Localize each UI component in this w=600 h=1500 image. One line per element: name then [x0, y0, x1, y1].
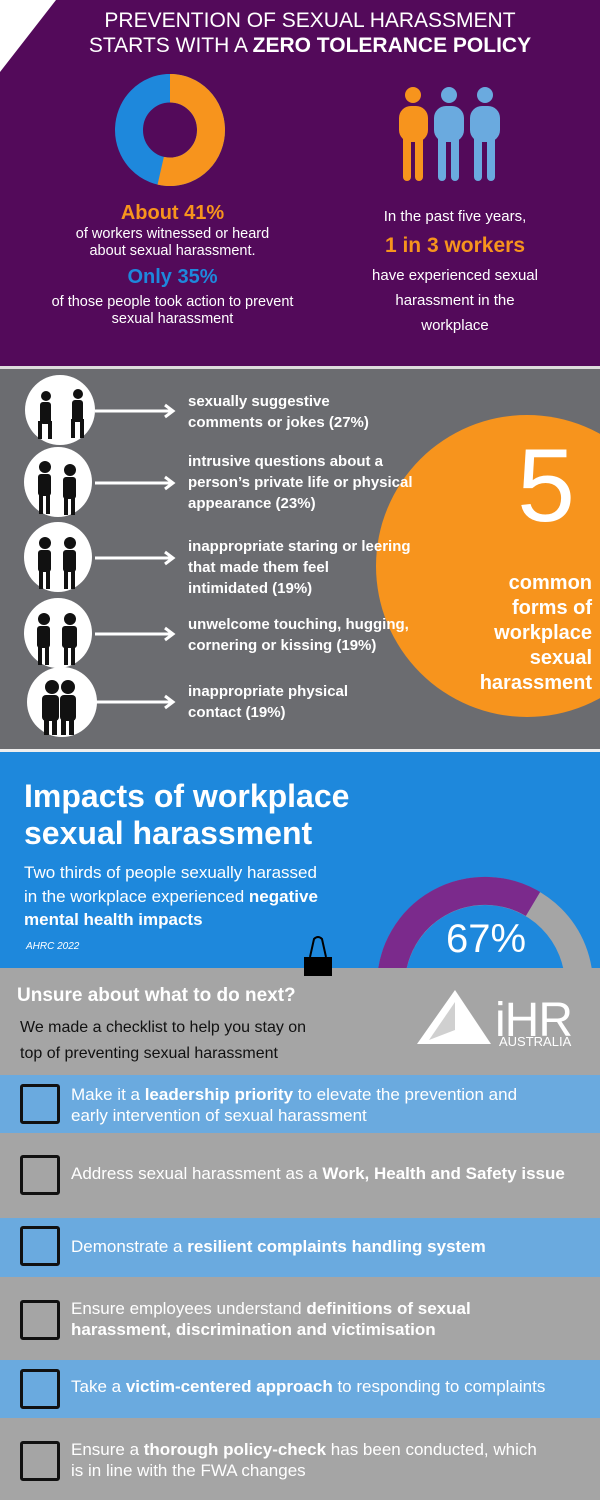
panel: 5 common forms: cornering or kissing (19%) [188, 637, 376, 654]
text: Ensure employees understand definitions of sexual [71, 1299, 471, 1318]
stat 41%: of those people took action to prevent [52, 294, 293, 310]
text: Ensure a thorough policy-check has been conducted, which [71, 1440, 537, 1459]
panel: checklist intro: top of preventing sexual harassment [20, 1045, 278, 1062]
text block [24, 863, 318, 929]
panel: 5 common forms: intrusive questions about a [188, 453, 383, 470]
panel: 5 common forms: contact (19%) [188, 704, 286, 721]
stat 41%: about sexual harassment. [89, 243, 256, 259]
panel: checklist intro [17, 985, 572, 1062]
logo: iHR [495, 994, 572, 1047]
panel: 5 common forms: inappropriate physical [188, 683, 348, 700]
text: harassment, discrimination and victimisation [71, 1320, 436, 1339]
text block: in the workplace experienced negative [24, 886, 318, 906]
stat 41% [52, 202, 294, 327]
panel: 5 common forms: unwelcome touching, hugging, [188, 616, 409, 633]
text: Demonstrate a resilient complaints handling system [71, 1237, 486, 1256]
text: is in line with the FWA changes [71, 1461, 306, 1480]
heading: sexual harassment [24, 815, 312, 851]
text block: Two thirds of people sexually harassed [24, 863, 317, 882]
orange circle callout: workplace [494, 622, 592, 644]
orange circle callout: harassment [480, 672, 592, 694]
stat 1 in 3: In the past five years, [384, 208, 526, 225]
stat 1 in 3: have experienced sexual [372, 267, 538, 284]
icon: three people [399, 87, 500, 181]
form texts: comments or jokes (27%) [188, 414, 369, 431]
panel: 5 common forms: appearance (23%) [188, 495, 316, 512]
panel: 5 common forms: inappropriate staring or leering [188, 538, 411, 555]
stat 1 in 3: 1 in 3 workers [385, 234, 525, 257]
form texts: sexually suggestive [188, 393, 330, 410]
heading [24, 778, 349, 851]
gauge chart: 67% [446, 917, 526, 961]
checklist: Make it a leadership priority to elevate the prevention and [71, 1085, 517, 1104]
panel: 5 common forms [0, 369, 600, 749]
source: AHRC 2022 [26, 941, 79, 952]
icons and arrows [24, 375, 176, 737]
text: Take a victim-centered approach to responding to complaints [71, 1377, 545, 1396]
orange circle callout: sexual [530, 647, 592, 669]
stat 41%: of workers witnessed or heard [76, 226, 269, 242]
corner triangle [0, 0, 56, 72]
panel: checklist intro: We made a checklist to help you stay on [20, 1019, 306, 1036]
checklist: early intervention of sexual harassment [71, 1106, 367, 1125]
title: PREVENTION OF SEXUAL HARASSMENT [104, 9, 516, 32]
text block: mental health impacts [24, 910, 203, 929]
title: STARTS WITH A ZERO TOLERANCE POLICY [89, 34, 531, 57]
form texts [188, 393, 369, 431]
checklist [0, 1075, 600, 1133]
icon: binder clip [304, 936, 332, 976]
panel: header purple [0, 0, 600, 366]
logo [417, 990, 572, 1048]
panel: 5 common forms: that made them feel [188, 559, 329, 576]
stat 1 in 3 [372, 208, 538, 334]
stat 41%: sexual harassment [112, 311, 233, 327]
orange circle callout [376, 415, 600, 717]
donut chart [115, 74, 225, 186]
stat 1 in 3: harassment in the [395, 292, 515, 309]
panel: 5 common forms: intimidated (19%) [188, 580, 312, 597]
stat 41%: About 41% [121, 202, 224, 224]
stat 41%: Only 35% [127, 266, 218, 288]
panel: impacts [0, 752, 600, 968]
panel: checklist intro: Unsure about what to do next? [17, 985, 296, 1006]
text: Address sexual harassment as a Work, Health and Safety issue [71, 1164, 565, 1183]
title [89, 9, 531, 57]
stat 1 in 3: workplace [421, 317, 489, 334]
orange circle callout: 5 [517, 428, 575, 544]
orange circle callout: forms of [512, 597, 592, 619]
orange circle callout: common [509, 572, 592, 594]
heading: Impacts of workplace [24, 778, 349, 814]
gauge chart [378, 876, 592, 968]
panel: 5 common forms: person’s private life or physical [188, 474, 413, 491]
